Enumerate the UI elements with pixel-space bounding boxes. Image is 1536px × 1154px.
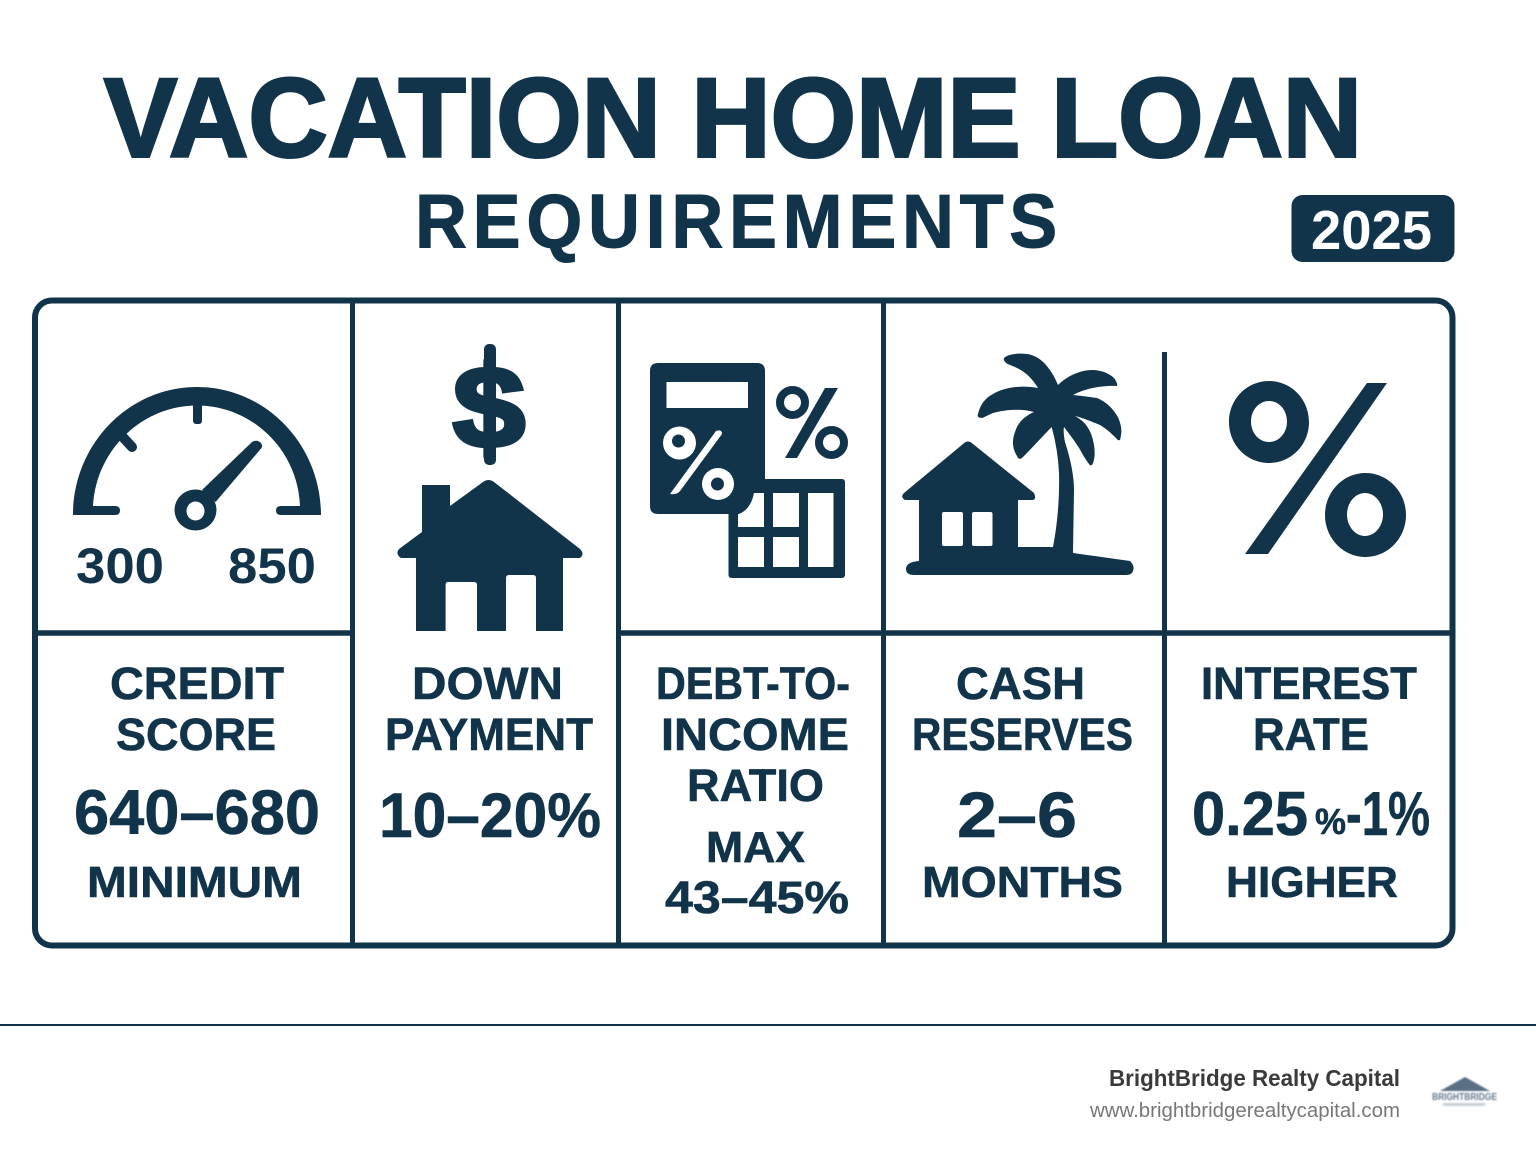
value: rate premium: % xyxy=(1315,801,1346,842)
icon: beach house and palm tree xyxy=(902,354,1134,575)
value: rate premium: -1% xyxy=(1346,780,1430,849)
heading: cash reserves: RESERVES xyxy=(912,709,1133,760)
value: rate premium xyxy=(1192,780,1430,849)
gauge maximum label: 850 xyxy=(228,538,316,594)
icon: calculator with percent and table xyxy=(650,363,845,578)
panel: interest rate xyxy=(1192,381,1430,907)
note: minimum: MINIMUM xyxy=(87,858,302,907)
heading: debt-to-income ratio: INCOME xyxy=(661,709,849,760)
panel: down payment xyxy=(379,344,601,851)
title: VACATION HOME LOAN xyxy=(104,56,1362,180)
icon: dollar sign above house: $ xyxy=(453,344,525,472)
heading: down payment: PAYMENT xyxy=(385,709,593,760)
heading: down payment: DOWN xyxy=(412,658,563,709)
gauge minimum label: 300 xyxy=(76,538,164,594)
heading: cash reserves xyxy=(912,658,1133,760)
company logo xyxy=(1432,1077,1497,1106)
icon: credit score gauge xyxy=(73,387,321,530)
heading: debt-to-income ratio: DEBT-TO- xyxy=(656,658,850,709)
value: down payment range: 10–20% xyxy=(379,781,601,851)
note: higher: HIGHER xyxy=(1226,858,1398,907)
heading: credit score: SCORE xyxy=(116,709,276,760)
value: debt-to-income maximum: MAX xyxy=(706,823,805,872)
heading: down payment xyxy=(385,658,593,760)
heading: credit score: CREDIT xyxy=(110,658,284,709)
company logo: BRIGHTBRIDGE xyxy=(1432,1092,1497,1103)
footer divider xyxy=(0,1024,1536,1026)
value: debt-to-income maximum: 43–45% xyxy=(665,872,849,923)
value: credit score range: 640–680 xyxy=(74,778,320,848)
icon: percent sign xyxy=(1229,381,1406,557)
heading: interest rate xyxy=(1201,658,1417,760)
panel: credit score xyxy=(73,387,321,907)
heading: interest rate: INTEREST xyxy=(1201,658,1417,709)
panel: debt-to-income ratio xyxy=(650,363,850,923)
heading: cash reserves: CASH xyxy=(956,658,1085,709)
footer website: www.brightbridgerealtycapital.com xyxy=(1089,1100,1400,1122)
panel: cash reserves xyxy=(902,354,1134,907)
heading: interest rate: RATE xyxy=(1253,709,1369,760)
heading: debt-to-income ratio: RATIO xyxy=(687,760,824,811)
value: rate premium: 0.25 xyxy=(1192,780,1308,849)
heading: credit score xyxy=(110,658,284,760)
icon: dollar sign above house xyxy=(397,344,582,631)
heading: debt-to-income ratio xyxy=(656,658,850,811)
value: reserve range: 2–6 xyxy=(957,779,1077,851)
requirements table frame xyxy=(35,300,1452,946)
footer company name: BrightBridge Realty Capital xyxy=(1109,1065,1400,1091)
year badge xyxy=(1292,195,1454,262)
year badge: 2025 xyxy=(1311,199,1432,261)
subtitle: REQUIREMENTS xyxy=(415,180,1063,264)
value: debt-to-income maximum xyxy=(665,823,849,923)
note: months: MONTHS xyxy=(922,858,1123,907)
